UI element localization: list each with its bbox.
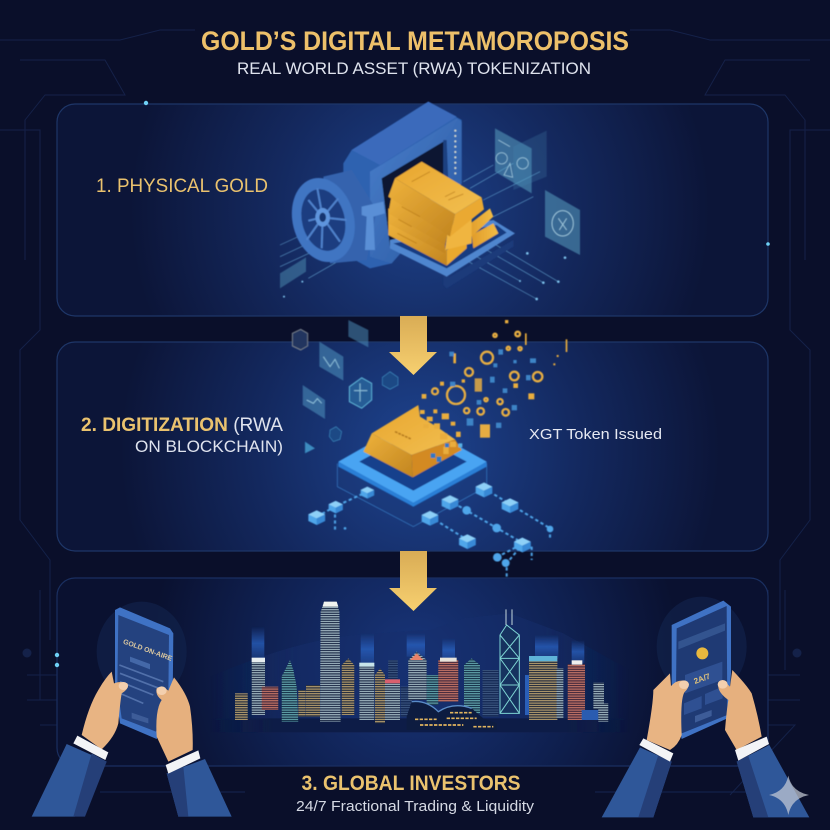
label: token issued: XGT Token Issued — [529, 426, 662, 443]
illustration: tokenized gold bar on chip — [292, 320, 567, 577]
convention centre — [407, 701, 497, 730]
left hand — [647, 673, 688, 750]
left hand — [82, 672, 128, 749]
subheading: global investors: 24/7 Fractional Trading & Liquidity — [296, 799, 535, 815]
sleeves — [602, 747, 672, 817]
hands and phone: right — [602, 597, 809, 817]
hands and phone: left — [32, 602, 232, 817]
heading: global investors: 3. GLOBAL INVESTORS — [302, 772, 520, 795]
phone: GOLD ON-AIRE — [122, 639, 173, 663]
panel: physical gold — [57, 104, 768, 316]
title: GOLD’S DIGITAL METAMOROPOSIS — [201, 26, 629, 56]
gold bar — [363, 433, 413, 477]
heading: digitization: 2. DIGITIZATION (RWA — [81, 415, 283, 436]
floating data icons — [292, 320, 398, 453]
arrow: digitization to investors — [389, 551, 437, 611]
vault dial door — [323, 170, 377, 263]
vault body — [343, 102, 462, 268]
cuffs — [73, 736, 108, 760]
panel: digitization — [57, 342, 768, 551]
digital tokens — [432, 332, 542, 416]
digital panel: upper — [495, 128, 547, 193]
digital panel: lower — [545, 190, 580, 255]
title — [201, 26, 629, 78]
bank tower — [500, 609, 519, 713]
right hand — [156, 677, 193, 762]
token card — [480, 424, 490, 438]
heading: digitization — [81, 415, 283, 456]
blockchain nodes — [317, 488, 550, 577]
right hand — [718, 670, 762, 750]
chip frame — [337, 463, 487, 527]
gold bars stack — [388, 222, 447, 266]
dissolving fragments — [420, 320, 567, 462]
glowing nodes — [55, 101, 770, 667]
phone — [115, 607, 173, 739]
blue particles — [449, 349, 536, 428]
mountain silhouette — [210, 613, 630, 720]
phone: 2A/7 — [693, 671, 712, 686]
cuffs — [639, 738, 673, 762]
phone — [672, 601, 731, 739]
vault platform — [390, 220, 515, 277]
data streams — [280, 163, 558, 299]
phone halo — [657, 597, 747, 697]
panel: global investors — [57, 578, 768, 766]
light beams — [252, 627, 584, 665]
sparkle watermark — [769, 776, 809, 815]
illustration: vault with gold bars — [280, 102, 580, 300]
heading: digitization: ON BLOCKCHAIN) — [135, 437, 283, 456]
subtitle: REAL WORLD ASSET (RWA) TOKENIZATION — [237, 60, 591, 78]
illustration: city skyline — [210, 602, 630, 732]
digital panel: small left — [280, 257, 306, 288]
sleeves — [32, 744, 107, 817]
heading: physical gold: 1. PHYSICAL GOLD — [96, 176, 268, 197]
phone halo — [97, 602, 187, 702]
towers — [235, 602, 608, 723]
arrow: physical to digitization — [389, 316, 437, 375]
gold bar engravings — [397, 172, 463, 243]
